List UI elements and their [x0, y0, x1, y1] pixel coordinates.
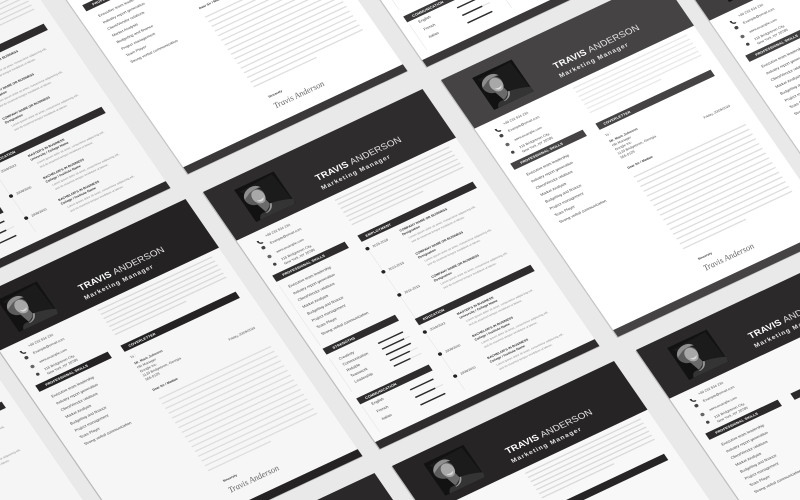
education description: sed do eiusmod tempor incididunt ut labore. [39, 141, 94, 169]
date: Friday, 20/09/2024 [703, 104, 731, 119]
education description: sed do eiusmod tempor incididunt ut labore. [69, 185, 125, 213]
intro text lines [335, 147, 466, 225]
skills list: Market Analysis [302, 294, 329, 309]
education entries: University / College Name [30, 141, 70, 162]
recipient: To : [129, 354, 137, 359]
education bar [0, 107, 106, 167]
languages: English [371, 397, 385, 406]
recipient: 555-0139 [620, 150, 636, 159]
education bar [415, 265, 535, 325]
education dates: 2006/2010 [15, 185, 32, 196]
portrait [472, 59, 534, 110]
footer bar [375, 339, 599, 449]
page: bottom-center cover letter [391, 361, 791, 500]
skills list: Budgeting and finance [306, 296, 344, 316]
contact details: 215 Bridgetown City, [518, 132, 551, 149]
communication bar [356, 365, 433, 404]
sign-off: Sincerely [697, 251, 713, 261]
skills list: Client/Vendor relations [107, 11, 145, 31]
employment entries: Designation [433, 271, 453, 283]
education entries: BACHELOR'S IN BUSINESS [42, 157, 86, 180]
recipient: Google Inc. [139, 362, 158, 373]
skills bar [35, 352, 112, 392]
page: right cover letter [440, 0, 800, 338]
contact details: New York, NY 20785 [283, 248, 316, 265]
skills list: Strong verbal communication [320, 311, 369, 336]
strengths list: Reliable [346, 363, 361, 372]
header band [0, 199, 219, 351]
education entries: College / Institute Name [60, 186, 97, 206]
employment dates: 2013-2015 [388, 261, 405, 271]
skills list: Client/Vendor relations [535, 170, 574, 190]
contact icons [256, 239, 278, 266]
job title: Marketing Manager [83, 264, 155, 301]
page: bottom edge header [155, 473, 551, 500]
name: TRAVIS ANDERSON [76, 245, 166, 293]
salutation: Dear Sir / Madam [152, 377, 179, 392]
contact details: New York, NY 20785 [716, 406, 749, 423]
skills list: Team Player [749, 474, 772, 487]
education description: Lorem ipsum dolor sit amet, consectetur adipiscing elit, [51, 152, 120, 187]
languages: Italian [381, 413, 393, 421]
skills list: Client/Vendor relations [730, 440, 769, 460]
contact details: 215 Bridgetown City, [753, 24, 786, 41]
skills list: Executive team leadership [721, 424, 765, 447]
footer bar [422, 0, 646, 67]
intro text lines [573, 35, 704, 113]
cover letter bar [120, 292, 240, 352]
right column bar [790, 340, 800, 400]
education description: Lorem ipsum dolor sit amet, consectetur adipiscing elit, [480, 310, 549, 345]
header band [636, 247, 800, 399]
employment description: sed do eiusmod tempor incididunt ut labore. [442, 261, 498, 290]
employment bar [357, 182, 477, 242]
job title: Marketing Manager [558, 42, 630, 79]
communication bar [0, 207, 4, 246]
education entries: College / Institute Name [489, 344, 526, 364]
sign-off: Sincerely [267, 89, 283, 99]
education dates: 2006/2010 [444, 343, 461, 354]
portrait [423, 445, 486, 496]
recipient: Mr. Mark Johnson [133, 349, 164, 365]
recipient: 555-0139 [145, 372, 161, 381]
education description: Lorem ipsum dolor sit amet, consectetur adipiscing elit, [36, 130, 105, 165]
footer bar [183, 64, 408, 174]
recipient: Google Inc. [614, 140, 633, 151]
skills list: Project management [74, 413, 110, 433]
page sheet [203, 89, 599, 449]
timelines and skill meters [279, 244, 468, 432]
contact details: Example@email.com [702, 385, 735, 403]
contact details: +00 232 534 234 [697, 381, 724, 396]
contact details: Example@email.com [269, 227, 302, 245]
skills heading: PROFESSIONAL SKILLS [45, 364, 89, 387]
education entries: University / College Name [459, 299, 499, 320]
contact details: www.example.com [38, 348, 68, 364]
skills list: Budgeting and finance [544, 184, 582, 204]
skills list: Executive team leadership [51, 376, 95, 399]
languages: English [418, 15, 432, 24]
cover letter bar [547, 454, 668, 500]
languages: French [423, 23, 436, 31]
employment entries: Designation [417, 248, 437, 259]
skills list: Industry report generation [102, 2, 146, 24]
recipient: 1120 Bridgetown, Georgia [142, 356, 182, 377]
contact details: +00 232 534 234 [27, 333, 54, 348]
recipient: Mr. Mark Johnson [608, 127, 639, 143]
employment entries: COMPANY NAME OR BUSINESS [399, 207, 449, 233]
employment entries: COMPANY NAME OR BUSINESS [431, 253, 481, 279]
contact details: www.example.com [513, 126, 543, 142]
contact details: New York, NY 20785 [756, 28, 789, 45]
cover letter heading: COVERLETTER [128, 332, 157, 348]
page: bottom-right cover letter [635, 247, 800, 500]
page: bottom-left cover letter [0, 199, 363, 500]
skills heading: PROFESSIONAL SKILLS [520, 142, 564, 165]
letter body lines [159, 346, 320, 471]
contact details: www.example.com [275, 238, 305, 254]
skills list: Project management [549, 191, 585, 211]
recipient: HR Manager [611, 135, 633, 147]
strengths list: Communication [342, 352, 369, 367]
footer bar [138, 449, 362, 500]
education entries: BACHELOR'S IN BUSINESS [57, 179, 101, 202]
name: TRAVIS ANDERSON [551, 23, 641, 71]
skills list: Industry report generation [530, 161, 574, 183]
header band [676, 0, 800, 21]
education entries: BACHELOR'S IN BUSINESS [471, 315, 515, 338]
employment dates: 2015-2018 [372, 238, 389, 248]
page: top-right resume [249, 0, 647, 68]
employment entries: COMPANY NAME OR BUSINESS [415, 230, 465, 256]
education dates: 2016/2022 [0, 163, 17, 174]
employment description: Lorem ipsum dolor sit amet, consectetur adipiscing elit, [424, 228, 493, 262]
education description: sed do eiusmod tempor incididunt ut labore. [498, 343, 554, 371]
education description: Lorem ipsum dolor sit amet, consectetur adipiscing elit, [465, 288, 534, 323]
signature: Travis Anderson [702, 242, 757, 273]
skills list: Executive team leadership [288, 266, 332, 289]
strengths list: Teamwork [350, 367, 368, 378]
employment bar [0, 402, 6, 462]
skills bar [705, 400, 782, 440]
portrait [667, 329, 729, 380]
contact details: +00 232 534 234 [502, 111, 529, 126]
contact icons [494, 127, 516, 154]
portrait [234, 171, 296, 222]
contact details: www.example.com [748, 18, 778, 34]
skills list: Industry report generation [292, 273, 336, 295]
skills list: Strong verbal communication [83, 421, 132, 446]
contact details: Example@email.com [742, 7, 775, 25]
skills bar [510, 130, 587, 170]
date: Friday, 20/09/2024 [228, 326, 256, 341]
skills list: Industry report generation [725, 431, 769, 453]
education dates: 2016/2022 [429, 321, 446, 332]
strengths bar [323, 315, 399, 355]
skills list: Market Analysis [65, 404, 92, 419]
employment description: Lorem ipsum dolor sit amet, consectetur adipiscing elit, [440, 251, 509, 286]
recipient: To : [604, 132, 612, 137]
recipient: HR Manager [136, 357, 158, 369]
letter body lines [634, 124, 795, 249]
communication bar [403, 0, 480, 22]
portrait [707, 0, 769, 2]
skills list: Team Player [554, 204, 577, 217]
contact details: +00 232 534 234 [264, 223, 291, 238]
skills heading: PROFESSIONAL SKILLS [715, 412, 759, 435]
employment description: Lorem ipsum dolor sit amet, consectetur adipiscing elit, [408, 205, 477, 239]
education entries: MASTER'S IN BUSINESS [456, 295, 495, 316]
employment entries: Designation [4, 113, 24, 125]
skills heading: PROFESSIONAL SKILLS [755, 34, 799, 57]
education dates: 2006/2010 [459, 365, 477, 376]
education description: sed do eiusmod tempor incididunt ut labore. [468, 299, 523, 327]
sign-off: Sincerely [222, 473, 238, 483]
page: top-left resume [0, 0, 171, 292]
page sheet [441, 0, 800, 337]
skills list: Executive team leadership [526, 154, 570, 177]
intro text lines [525, 419, 657, 498]
signature: Travis Anderson [271, 79, 327, 110]
header band [203, 89, 456, 241]
signature: Travis Anderson [227, 464, 282, 495]
skills list: Strong verbal communication [130, 39, 179, 64]
skills list: Project management [311, 303, 347, 323]
skills list: Market Analysis [735, 452, 762, 467]
education description: Lorem ipsum dolor sit amet, consectetur adipiscing elit, [66, 174, 135, 209]
contact details: +00 232 534 234 [737, 3, 764, 18]
cover letter heading: COVERLETTER [603, 110, 632, 126]
education description: sed do eiusmod tempor incididunt ut labore. [54, 163, 109, 191]
strengths heading: STRENGTHS [332, 336, 356, 350]
contact details: www.example.com [708, 396, 738, 412]
education dates: 2006/2010 [30, 207, 48, 218]
contact details: New York, NY 20785 [521, 136, 554, 153]
page: far-left resume [0, 309, 129, 500]
skills list: Strong verbal communication [558, 199, 607, 224]
page: top-center cover letter [13, 0, 408, 175]
salutation: Dear Sir / Madam [627, 155, 654, 170]
education entries: College / Institute Name [474, 322, 511, 342]
skills list: Budgeting and finance [116, 24, 154, 44]
page sheet [0, 199, 362, 500]
name: TRAVIS ANDERSON [313, 135, 403, 183]
employment description: sed do eiusmod tempor incididunt ut labore. [13, 103, 69, 132]
portrait [0, 281, 59, 332]
employment bar [0, 24, 48, 84]
skills list: Market Analysis [540, 182, 567, 197]
skills list: Team Player [125, 45, 148, 57]
job title: Marketing Manager [320, 154, 392, 191]
intro text lines [98, 257, 229, 335]
skills bar [745, 22, 800, 62]
communication heading: COMMUNICATION [364, 382, 398, 400]
employment entries: COMPANY NAME OR BUSINESS [2, 95, 52, 121]
strengths list: Creativity [338, 351, 355, 361]
name: TRAVIS ANDERSON [503, 407, 594, 456]
strengths list: Leadership [354, 372, 374, 384]
job title: Marketing Manager [510, 426, 583, 465]
contact icons [689, 397, 711, 424]
contact details: Example@email.com [32, 337, 65, 355]
skills list: Budgeting and finance [739, 454, 777, 474]
footer bar [613, 227, 800, 337]
skills list: Team Player [79, 426, 102, 439]
header band [392, 361, 647, 500]
contact details: Example@email.com [507, 115, 540, 133]
skills bar [272, 242, 349, 282]
employment description: sed do eiusmod tempor incididunt ut labore. [410, 215, 466, 243]
skills list: Industry report generation [55, 383, 99, 405]
skills list: Team Player [316, 316, 339, 329]
skills list: Project management [744, 461, 780, 481]
education entries: BACHELOR'S IN BUSINESS [486, 337, 530, 360]
contact details: New York, NY 20785 [46, 358, 79, 375]
skills list: Market Analysis [111, 23, 139, 38]
employment dates: 2012-2013 [404, 284, 421, 294]
contact icons [19, 349, 41, 376]
education heading: EDUCATION [422, 308, 446, 321]
skills list: Project management [120, 32, 157, 51]
contact details: 215 Bridgetown City, [713, 402, 746, 419]
contact details: 215 Bridgetown City, [280, 244, 313, 261]
skills bar [82, 0, 159, 11]
page: top-right corner resume [675, 0, 800, 230]
employment description: Lorem ipsum dolor sit amet, consectetur adipiscing elit, [11, 93, 80, 128]
page: center resume [202, 89, 600, 450]
contact icons [729, 19, 751, 46]
education entries: MASTER'S IN BUSINESS [27, 137, 66, 158]
header band [441, 0, 694, 129]
languages: French [376, 405, 389, 413]
skills heading: PROFESSIONAL SKILLS [282, 254, 326, 277]
education description: sed do eiusmod tempor incididunt ut labore. [483, 321, 538, 349]
skills list: Client/Vendor relations [297, 282, 336, 302]
contact details: 215 Bridgetown City, [43, 354, 76, 371]
cover letter bar [595, 70, 715, 130]
employment entries: Designation [401, 225, 421, 236]
skills list: Budgeting and finance [69, 406, 107, 426]
header band [155, 473, 408, 500]
employment description: sed do eiusmod tempor incididunt ut labore. [426, 238, 482, 266]
communication heading: COMMUNICATION [411, 0, 445, 18]
employment heading: EMPLOYMENT [365, 223, 393, 238]
recipient: 1120 Bridgetown, Georgia [617, 134, 657, 155]
languages: Italian [428, 31, 440, 39]
footer bar [0, 181, 170, 291]
education entries: College / Institute Name [45, 164, 82, 184]
education description: Lorem ipsum dolor sit amet, consectetur adipiscing elit, [495, 332, 564, 367]
skills list: Client/Vendor relations [60, 392, 99, 412]
